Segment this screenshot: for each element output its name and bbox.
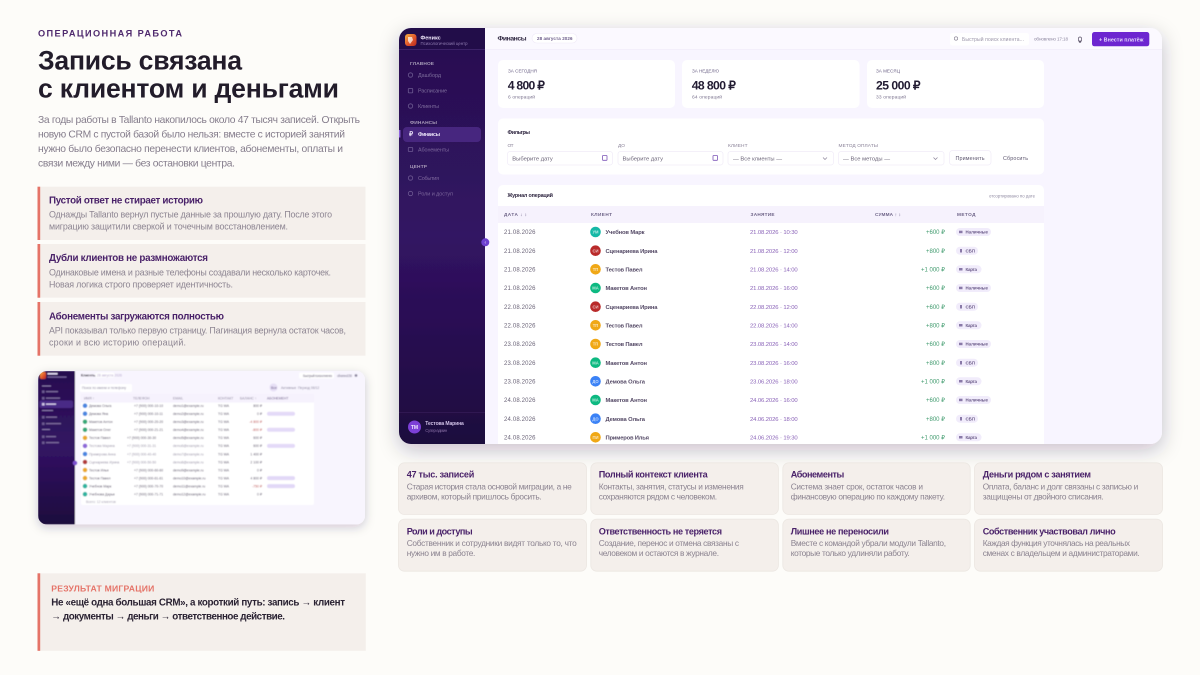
small clients table: Учебнова Дарья (89, 492, 115, 496)
row 3: Карта (966, 267, 978, 272)
card: duplicate clients (38, 244, 366, 298)
icon: bell (1078, 37, 1082, 42)
row 8: 23.08.2026 · 16:00 (750, 361, 798, 367)
small clients table: Тестова Марина (89, 444, 115, 448)
row 4: +600 ₽ (926, 285, 945, 292)
KPI card: week: 64 операций (692, 94, 722, 100)
small clients table: ИМЯ ↑ (84, 396, 95, 400)
card: duplicate clients: Одинаковые имена и разные телефоны создавали несколько карточек. (49, 267, 331, 277)
intro paragraph (38, 114, 360, 170)
small screenshot: clients table (38, 371, 365, 524)
row 12: 24.06.2026 · 19:30 (750, 436, 798, 442)
nav group: main: Дашборд (418, 73, 442, 79)
row 12: Примеров Илья (606, 436, 649, 442)
KPI card: week: ЗА НЕДЕЛЮ (692, 68, 719, 74)
row 10: Наличные (966, 398, 989, 403)
row 2: 21.08.2026 · 12:00 (750, 249, 798, 255)
card: 47k records: архивом, который пришлось бросить. (407, 491, 542, 501)
row 8: СБП (966, 360, 975, 365)
table header: МЕТОД (957, 212, 976, 217)
small clients table: 1 400 ₽ (250, 452, 262, 456)
small clients table: -4 800 ₽ (249, 420, 262, 424)
small clients table: demo7@example.ru (173, 452, 204, 456)
card: subscriptions (783, 463, 970, 514)
table header: ЗАНЯТИЕ (750, 212, 774, 217)
row 2: +800 ₽ (926, 248, 945, 255)
row 12 (504, 432, 982, 443)
nav group: finance: ФИНАНСЫ (410, 120, 437, 126)
row 7: Наличные (966, 342, 989, 347)
nav group: main: ГЛАВНОЕ (410, 61, 435, 67)
row 1: Учебнов Марк (606, 229, 645, 236)
row 8 (504, 357, 978, 368)
small clients table: TG WA (218, 436, 230, 440)
small sidebar (38, 371, 75, 524)
button: apply (950, 150, 991, 165)
row 3: +1 000 ₽ (921, 266, 945, 274)
row 11: СБП (966, 416, 975, 421)
small clients table: demo6@example.ru (173, 444, 204, 448)
row 4: 21.08.2026 · 16:00 (750, 286, 798, 292)
small top bar (80, 373, 358, 378)
KPI card: month: ЗА МЕСЯЦ (876, 68, 901, 74)
small clients table: +7 (900) 000-71-71 (134, 492, 163, 496)
small clients table: 4 800 ₽ (250, 476, 262, 480)
small search and filters (80, 384, 319, 392)
small clients table: demo2@example.ru (173, 412, 204, 416)
row 7: ТП (593, 342, 598, 347)
logo: Психологический центр (420, 41, 468, 46)
filter: to (618, 143, 723, 165)
row 3: ТП (593, 267, 598, 272)
title: Запись связана (38, 46, 242, 76)
card: duplicate clients: Новая логика строго проверяет идентичность. (49, 279, 233, 289)
row 11: 24.08.2026 (504, 417, 536, 423)
small clients table: +7 (900) 000-21-21 (134, 428, 163, 432)
row 11 (504, 413, 978, 424)
row 8: Макетов Антон (606, 361, 647, 367)
card: empty response: Пустой ответ не стирает историю (49, 196, 203, 206)
filter: from: Выберите дату (512, 157, 553, 163)
intro paragraph: За годы работы в Tallanto накопилось около 47 тысяч записей. Открыть (38, 114, 360, 126)
row 2: Сценариева Ирина (606, 249, 658, 255)
title (38, 46, 339, 104)
row 2: 21.08.2026 (504, 249, 536, 255)
filter: payment method (838, 143, 944, 165)
row 10: +600 ₽ (926, 397, 945, 404)
card: client context: сохраняются рядом с человеком. (599, 491, 717, 501)
row 12: Карта (966, 435, 978, 440)
card: client context: Полный контекст клиента (599, 470, 709, 480)
small clients table: demo3@example.ru (173, 420, 204, 424)
small search and filters: Активные (281, 386, 296, 390)
card: roles: Роли и доступы (407, 526, 473, 536)
nav group: finance: ₽ (409, 130, 414, 138)
KPI card: today (498, 60, 675, 108)
KPI card: today: 4 800 ₽ (508, 78, 545, 92)
row 6 (504, 320, 982, 331)
date pill (532, 34, 577, 43)
small clients table: Макетов Антон (89, 420, 113, 424)
small clients table: +7 (900) 000-30-30 (127, 436, 156, 440)
nav group: finance: Абонементы (418, 148, 449, 154)
nav group: center: ЦЕНТР (410, 164, 428, 170)
panel: problem cards (38, 187, 366, 356)
search box (954, 36, 1024, 42)
table header: ДАТА ↓ ↕ (504, 212, 527, 217)
small clients table: +7 (900) 000-70-70 (134, 484, 163, 488)
filter: from: ОТ (508, 143, 514, 149)
row 6: ТП (593, 323, 598, 328)
left intro block (38, 28, 360, 170)
small clients table: +7 (900) 000-50-50 (127, 460, 156, 464)
small clients table: +7 (900) 000-10-10 (134, 404, 163, 408)
small top bar: обновлено 17:18 (337, 374, 352, 378)
row 2: СИ (592, 248, 599, 253)
row 6: 22.08.2026 · 14:00 (750, 324, 798, 330)
small clients table: TG WA (218, 452, 230, 456)
nav group: main: Расписание (418, 88, 447, 94)
sidebar (399, 28, 485, 444)
user profile: ТМ (411, 425, 418, 431)
KPI card: week: 48 800 ₽ (692, 78, 736, 92)
filter: to: Выберите дату (622, 157, 663, 163)
small clients table: Примерова Анна (89, 452, 116, 456)
user profile: Тестова Марина (425, 421, 464, 427)
small clients table: TG WA (218, 492, 230, 496)
small clients table: АБОНЕМЕНТ (267, 396, 288, 400)
filter: to: ДО (618, 143, 625, 149)
filter: client: КЛИЕНТ (728, 143, 748, 149)
row 1: +600 ₽ (926, 229, 945, 236)
small clients table: -750 ₽ (252, 484, 262, 488)
small clients table: Всего: 12 клиентов (86, 500, 116, 504)
small top bar: 28 августа 2026 (97, 373, 122, 377)
filter: client (728, 143, 834, 165)
small clients table: 600 ₽ (253, 444, 262, 448)
card: responsibility (591, 519, 778, 571)
button: add payment: + Внести платёж (1099, 37, 1144, 43)
nav group: center (408, 164, 453, 198)
card: subscriptions: финансовую операцию по каждому пакету. (791, 491, 945, 501)
row 4: МА (592, 286, 599, 291)
small clients table: demo4@example.ru (173, 428, 204, 432)
row 8: МА (592, 360, 599, 365)
card: empty response: Однажды Tallanto вернул пустые данные за прошлую дату. После этого (49, 210, 332, 220)
card: money next to session: Деньги рядом с занятием (983, 470, 1091, 480)
row 9: Демова Ольга (606, 380, 646, 386)
row 10: 24.08.2026 (504, 398, 536, 404)
intro paragraph: связи между ними — без остановки центра. (38, 158, 235, 170)
small clients table: TG WA (218, 404, 230, 408)
top bar (485, 32, 1162, 50)
card: client context: Контакты, занятия, статусы и изменения (599, 481, 744, 491)
small clients table: 800 ₽ (253, 404, 262, 408)
card: subscriptions: сроки и всю историю операций. (49, 337, 186, 347)
nav group: center: События (418, 176, 439, 182)
row 7: +600 ₽ (926, 341, 945, 348)
small clients table: TG WA (218, 476, 230, 480)
small collapse toggle (73, 461, 77, 465)
row 5: СБП (966, 304, 975, 309)
card: responsibility: Создание, перенос и отмена связаны с (599, 538, 739, 548)
row 4: Макетов Антон (606, 286, 647, 292)
row 4: 21.08.2026 (504, 286, 536, 292)
card: 47k records (398, 463, 586, 514)
row 9: Карта (966, 379, 978, 384)
panel: feature cards (398, 463, 1162, 571)
card: responsibility: человеком и остаются в журнале. (599, 548, 719, 558)
small clients table: +7 (900) 000-61-61 (134, 476, 163, 480)
card: money next to session: Оплата, баланс и долг связаны с записью и (983, 481, 1139, 491)
filter: client: — Все клиенты — (733, 157, 782, 163)
small clients table: ТЕЛЕФОН (133, 396, 150, 400)
nav group: main: Клиенты (418, 104, 439, 110)
panel: operations journal: Журнал операций (506, 192, 553, 199)
small clients table: Демова Ольга (89, 404, 111, 408)
user profile (399, 412, 485, 434)
small clients table: Сценариева Ирина (89, 460, 119, 464)
card: owner participated: Каждая функция уточнялась на реальных (983, 538, 1131, 548)
button: add payment (1092, 32, 1149, 46)
small clients table: demo8@example.ru (173, 460, 204, 464)
card: 47k records: Старая история стала основой миграции, а не (407, 481, 572, 491)
row 7: 23.08.2026 (504, 342, 536, 348)
row 11: 24.06.2026 · 18:00 (750, 417, 798, 423)
filter: payment method: МЕТОД ОПЛАТЫ (838, 143, 878, 149)
row 1: Наличные (966, 230, 989, 235)
small clients table: +7 (900) 000-40-40 (127, 452, 156, 456)
row 11: ДО (592, 416, 599, 421)
small top bar: Клиенты (81, 374, 96, 378)
row 9: 23.06.2026 · 18:00 (750, 380, 798, 386)
small search and filters: Период 06/12 (298, 386, 319, 390)
KPI card: month (867, 60, 1044, 108)
user profile: Супер-админ (425, 428, 448, 433)
small clients table: EMAIL (173, 396, 183, 400)
row 12: +1 000 ₽ (921, 434, 945, 442)
small clients table: +7 (900) 000-20-20 (134, 420, 163, 424)
row 11: Демова Ольга (606, 417, 646, 423)
intro paragraph: новую CRM с пустой базой было нельзя: вместе с историей занятий (38, 129, 345, 141)
row 6: Тестов Павел (606, 324, 643, 330)
row 9: 23.08.2026 (504, 380, 536, 386)
small clients table: Макетов Олег (89, 428, 112, 432)
nav group: main (408, 61, 447, 110)
row 3: 21.08.2026 · 14:00 (750, 268, 798, 274)
small clients table: TG WA (218, 468, 230, 472)
filter: from (508, 143, 612, 165)
panel: operations journal: отсортировано по дате (989, 194, 1036, 198)
card: money next to session (974, 463, 1162, 514)
card: owner participated (974, 519, 1162, 571)
panel: migration result (38, 573, 366, 651)
small clients table: TG WA (218, 444, 230, 448)
result label: РЕЗУЛЬТАТ МИГРАЦИИ (51, 583, 154, 593)
row 5: +600 ₽ (926, 304, 945, 311)
card: subscriptions: Абонементы загружаются полностью (49, 311, 224, 322)
button: reset: Сбросить (1003, 156, 1028, 162)
row 2 (504, 245, 978, 256)
small clients table: demo10@example.ru (173, 476, 206, 480)
small search and filters: Все (271, 386, 277, 390)
result text: → документы → деньги → ответственное действие. (51, 611, 285, 622)
KPI card: month: 25 000 ₽ (876, 78, 921, 92)
button: apply: Применить (956, 156, 985, 162)
card: roles (398, 519, 586, 571)
card: no excess: Лишнее не переносили (791, 526, 889, 536)
row 10 (504, 395, 991, 405)
sidebar collapse toggle: ‹ (484, 240, 486, 246)
row 11: +800 ₽ (926, 416, 945, 423)
row 5: 22.08.2026 (504, 305, 536, 311)
panel: filters: Фильтры (508, 130, 530, 136)
small clients table: TG WA (218, 460, 230, 464)
date pill: 28 августа 2026 (537, 36, 573, 41)
result text (51, 598, 345, 622)
row 5 (504, 301, 978, 312)
row 4 (504, 283, 991, 293)
small clients table: demo5@example.ru (173, 436, 204, 440)
row 8: +800 ₽ (926, 360, 945, 367)
card: owner participated: Собственник участвовал лично (983, 526, 1116, 536)
small clients table: 2 100 ₽ (250, 460, 262, 464)
row 1 (504, 227, 991, 237)
panel: filters (498, 118, 1044, 174)
row 6: 22.08.2026 (504, 324, 536, 330)
card: subscriptions: Система знает срок, остаток часов и (791, 481, 923, 491)
small clients table: -800 ₽ (252, 428, 262, 432)
small clients table: TG WA (218, 484, 230, 488)
row 6: Карта (966, 323, 978, 328)
row 12: ПИ (592, 435, 599, 440)
card: subscriptions: Абонементы (791, 470, 845, 480)
sidebar collapse toggle (481, 238, 489, 246)
small clients table: Тестов Павел (89, 476, 110, 480)
row 12: 24.08.2026 (504, 436, 536, 442)
search box: Быстрый поиск клиента... (962, 36, 1024, 43)
title: с клиентом и деньгами (38, 74, 339, 104)
filter: payment method: — Все методы — (843, 157, 890, 163)
small clients table: 0 ₽ (257, 412, 262, 416)
KPI card: today: ЗА СЕГОДНЯ (508, 68, 537, 74)
card: roles: Собственник и сотрудники видят только то, что (407, 538, 577, 548)
card: no excess (783, 519, 970, 571)
card: subscriptions (38, 302, 366, 356)
table header: КЛИЕНТ (591, 212, 612, 217)
nav group: center: Роли и доступ (418, 192, 453, 198)
small clients table: demo12@example.ru (173, 492, 206, 496)
small clients table: 0 ₽ (257, 468, 262, 472)
row 10: МА (592, 398, 599, 403)
row 10: Макетов Антон (606, 398, 647, 404)
KPI card: month: 33 операций (876, 94, 906, 100)
small clients table: 0 ₽ (257, 492, 262, 496)
card: empty response: миграцию защитили сверкой и точечным восстановлением. (49, 222, 288, 232)
row 4: Наличные (966, 286, 989, 291)
row 6: +800 ₽ (926, 322, 945, 330)
small clients table: БАЛАНС ↑ (240, 396, 257, 400)
small top bar: Быстрый поиск клиента (303, 374, 332, 378)
card: duplicate clients: Дубли клиентов не размножаются (49, 253, 208, 264)
card: subscriptions: API показывал только первую страницу. Пагинация вернула остаток часов, (49, 325, 346, 335)
card: client context (591, 463, 778, 514)
updated time: обновлено 17:18 (1034, 36, 1068, 41)
card: empty response (38, 187, 366, 240)
row 2: СБП (966, 248, 975, 253)
row 1: 21.08.2026 (504, 230, 536, 236)
row 3: 21.08.2026 (504, 268, 536, 274)
row 7: 23.08.2026 · 14:00 (750, 342, 798, 348)
card: no excess: Вместе с командой убрали модули Tallanto, (791, 538, 946, 548)
small clients table: Учебнов Марк (89, 484, 112, 488)
small clients table: 600 ₽ (253, 436, 262, 440)
small clients table: Тестов Павел (89, 436, 110, 440)
small search and filters: Поиск по имени и телефону (82, 386, 126, 390)
small clients table: Тестов Илья (89, 468, 109, 472)
small clients table: TG WA (218, 428, 230, 432)
logo: Феникс (420, 35, 441, 41)
row 1: 21.08.2026 · 10:30 (750, 230, 798, 236)
row 7 (504, 339, 991, 349)
card: roles: нужно им в работе. (407, 548, 475, 558)
small clients table: demo11@example.ru (173, 484, 205, 488)
row 9 (504, 376, 982, 387)
card: 47k records: 47 тыс. записей (407, 470, 474, 480)
row 8: 23.08.2026 (504, 361, 536, 367)
row 9: +1 000 ₽ (921, 378, 945, 386)
row 7: Тестов Павел (606, 342, 643, 348)
small clients table: demo9@example.ru (173, 468, 204, 472)
row 5: 22.08.2026 · 12:00 (750, 305, 798, 311)
small clients table: demo1@example.ru (173, 404, 204, 408)
small clients table (81, 394, 314, 505)
row 3 (504, 264, 982, 275)
card: no excess: которые только удлиняли работу. (791, 548, 910, 558)
nav group: finance: Финансы (418, 132, 441, 138)
row 10: 24.06.2026 · 16:00 (750, 398, 798, 404)
eyebrow: ОПЕРАЦИОННАЯ РАБОТА (38, 28, 182, 38)
KPI card: week (682, 60, 860, 108)
top bar: Финансы (498, 36, 527, 43)
row 5: Сценариева Ирина (606, 305, 658, 311)
nav group: finance (399, 120, 481, 154)
card: owner participated: сменах с владельцем и администраторами. (983, 548, 1140, 558)
main screenshot: finance dashboard (399, 28, 1162, 465)
result text: Не «ещё одна большая CRM», а короткий путь: запись → клиент (51, 598, 345, 609)
panel: operations journal (498, 185, 1044, 465)
small clients table: Демова Яна (89, 412, 108, 416)
small clients table: +7 (900) 000-31-31 (127, 444, 156, 448)
row 3: Тестов Павел (606, 268, 643, 274)
table header: СУММА ↑ ↕ (875, 212, 901, 217)
small clients table: КОНТАКТ (218, 396, 233, 400)
row 5: СИ (592, 304, 599, 309)
logo (405, 34, 468, 46)
intro paragraph: нужно было безопасно перенести клиентов, абонементы, оплаты и (38, 143, 343, 155)
card: money next to session: защищены от двойного списания. (983, 491, 1104, 501)
card: responsibility: Ответственность не теряется (599, 526, 722, 536)
small clients table: TG WA (218, 412, 230, 416)
table header (498, 206, 1044, 223)
small clients table: +7 (900) 000-10-11 (134, 412, 163, 416)
KPI card: today: 6 операций (508, 94, 535, 100)
small clients table: +7 (900) 000-60-60 (134, 468, 163, 472)
row 9: ДО (592, 379, 599, 384)
small clients table: TG WA (218, 420, 230, 424)
row 1: УМ (592, 230, 599, 235)
